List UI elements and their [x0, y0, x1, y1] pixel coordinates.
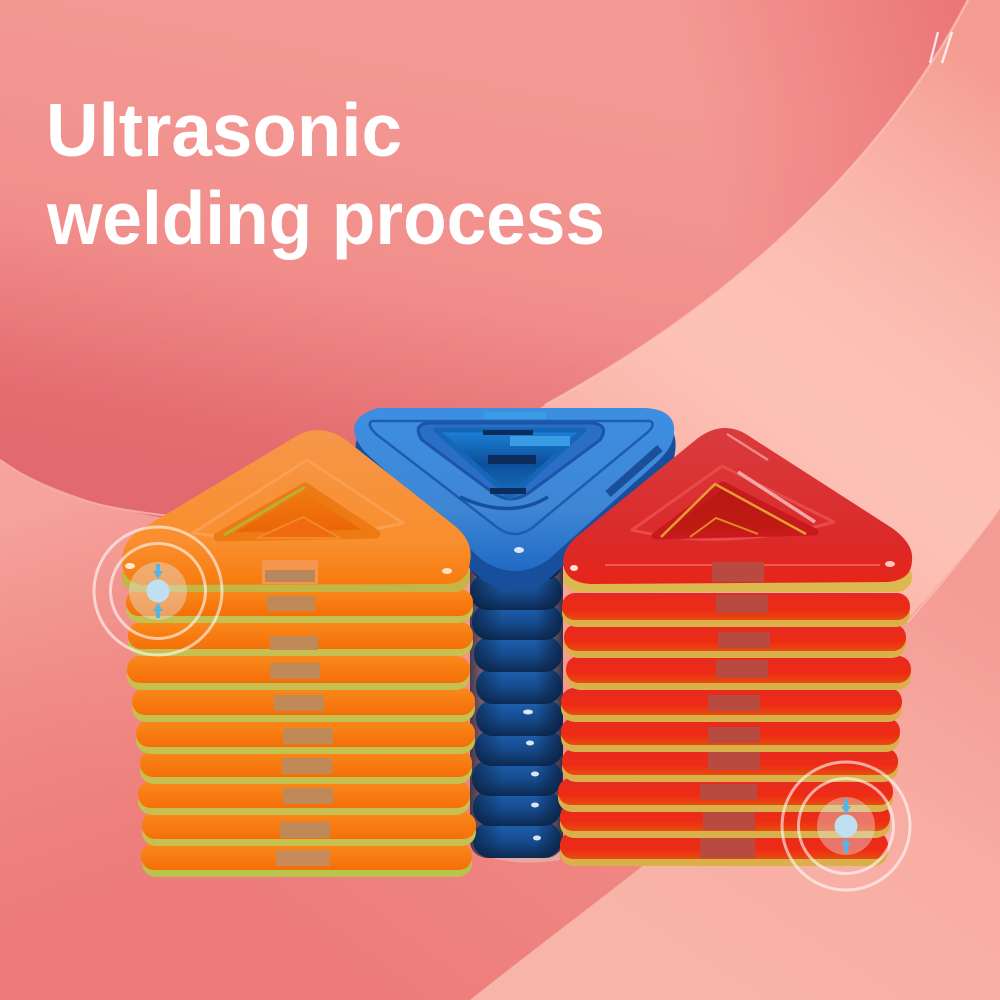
orange slab 6: [136, 720, 475, 754]
red slab 7: [562, 748, 898, 782]
red slab 5: [561, 688, 902, 722]
blue side column: [470, 540, 563, 858]
title: [46, 88, 605, 260]
red block stack: [558, 428, 912, 866]
orange slab 9: [142, 812, 476, 846]
red slab 3: [564, 624, 906, 658]
red slab 4: [566, 656, 911, 690]
orange slab 10: [141, 843, 472, 877]
orange slab 7: [140, 750, 472, 784]
orange slab 3: [128, 622, 473, 656]
title: welding process: [46, 176, 605, 260]
red slab 10: [560, 832, 888, 866]
highlight marker: left weld point: [94, 527, 222, 655]
orange slab 8: [138, 781, 470, 815]
highlight marker: right weld point: [782, 762, 910, 890]
decorative slashes top right: [930, 32, 952, 63]
red slab 9: [560, 804, 890, 838]
red slab 6: [561, 718, 900, 752]
orange top slab: [122, 430, 471, 592]
red slab 2: [562, 593, 910, 627]
red top slab: [563, 428, 912, 592]
blue shadow on floor: [470, 830, 560, 863]
blue top face: [354, 408, 674, 571]
orange block stack: [122, 430, 476, 877]
orange slab 4: [127, 656, 470, 690]
orange slab 2: [126, 589, 473, 623]
title: Ultrasonic: [46, 88, 402, 172]
orange slab 5: [132, 688, 475, 722]
blue block stack: [354, 408, 676, 863]
blue thickness edge: [356, 420, 676, 590]
red slab 8: [558, 778, 893, 812]
